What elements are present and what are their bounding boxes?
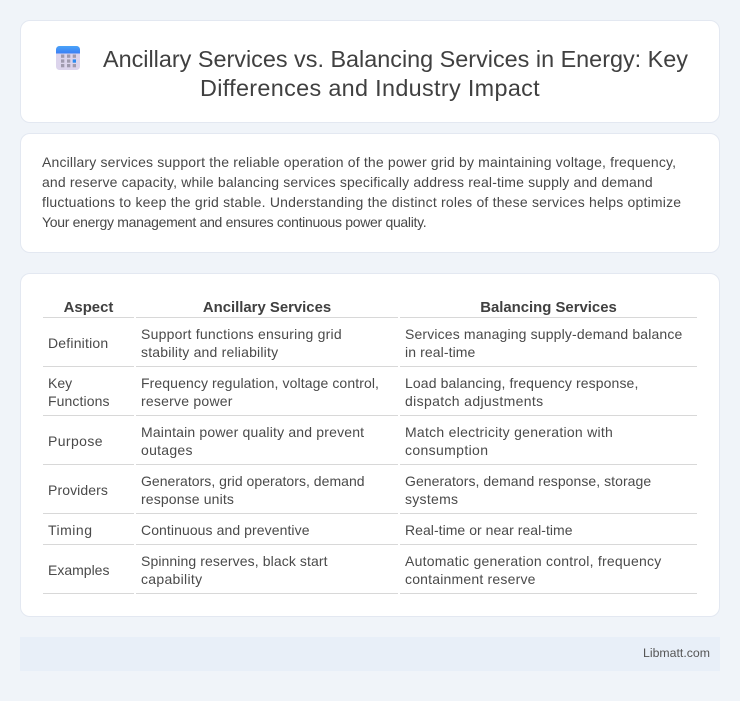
row: purpose: Match electricity generation with [405, 424, 613, 440]
row: purpose [48, 424, 613, 458]
row: purpose: outages [141, 442, 193, 458]
row: timing: Timing [48, 522, 92, 538]
table header: Ancillary Services [203, 300, 331, 316]
row: definition [48, 326, 682, 360]
row: definition: Definition [48, 335, 108, 351]
table header: Balancing Services [480, 300, 617, 316]
row: examples: containment reserve [405, 571, 536, 587]
row: examples: Examples [48, 562, 109, 578]
footer text: Libmatt.com [643, 646, 710, 660]
row: timing: Continuous and preventive [141, 522, 310, 538]
comparison table card [20, 273, 720, 617]
intro paragraph card [20, 133, 720, 253]
header card [20, 20, 720, 123]
icon: calendar grid [56, 46, 80, 70]
title: Differences and Industry Impact [200, 75, 540, 101]
row: purpose: Maintain power quality and prevent [141, 424, 364, 440]
intro text: and reserve capacity, while balancing services specifically address real-time supply and demand [42, 174, 653, 190]
row: definition: Support functions ensuring grid [141, 326, 342, 342]
title: Ancillary Services vs. Balancing Services in Energy: Key [103, 46, 688, 72]
row: providers: Providers [48, 482, 108, 498]
intro text: Ancillary services support the reliable operation of the power grid by maintaining voltage, frequency, [42, 154, 676, 170]
title [103, 46, 688, 101]
row: examples: Automatic generation control, frequency [405, 553, 661, 569]
table header: Aspect [64, 300, 113, 316]
row: key functions: Load balancing, frequency response, [405, 375, 638, 391]
row: providers: response units [141, 491, 234, 507]
footer bar [20, 637, 720, 671]
intro text: Your energy management and ensures continuous power quality. [42, 214, 426, 230]
row: providers: systems [405, 491, 458, 507]
row: definition: in real-time [405, 344, 475, 360]
row: examples: capability [141, 571, 202, 587]
row: key functions [48, 375, 638, 409]
row: key functions: Frequency regulation, voltage control, [141, 375, 379, 391]
row: key functions: reserve power [141, 393, 233, 409]
table header [64, 300, 617, 316]
row: timing [48, 522, 573, 538]
row: definition: Services managing supply-demand balance [405, 326, 682, 342]
row: purpose: consumption [405, 442, 488, 458]
row: timing: Real-time or near real-time [405, 522, 573, 538]
row: providers [48, 473, 651, 507]
row: providers: Generators, demand response, storage [405, 473, 651, 489]
row: key functions: Key [48, 375, 72, 391]
intro text [42, 154, 681, 230]
row: examples: Spinning reserves, black start [141, 553, 328, 569]
row: purpose: Purpose [48, 433, 103, 449]
intro text: fluctuations to keep the grid stable. Understanding the distinct roles of these services helps optimize [42, 194, 681, 210]
row: examples [48, 553, 662, 587]
row: providers: Generators, grid operators, demand [141, 473, 365, 489]
row: definition: stability and reliability [141, 344, 278, 360]
row: key functions: Functions [48, 393, 110, 409]
row: key functions: dispatch adjustments [405, 393, 544, 409]
